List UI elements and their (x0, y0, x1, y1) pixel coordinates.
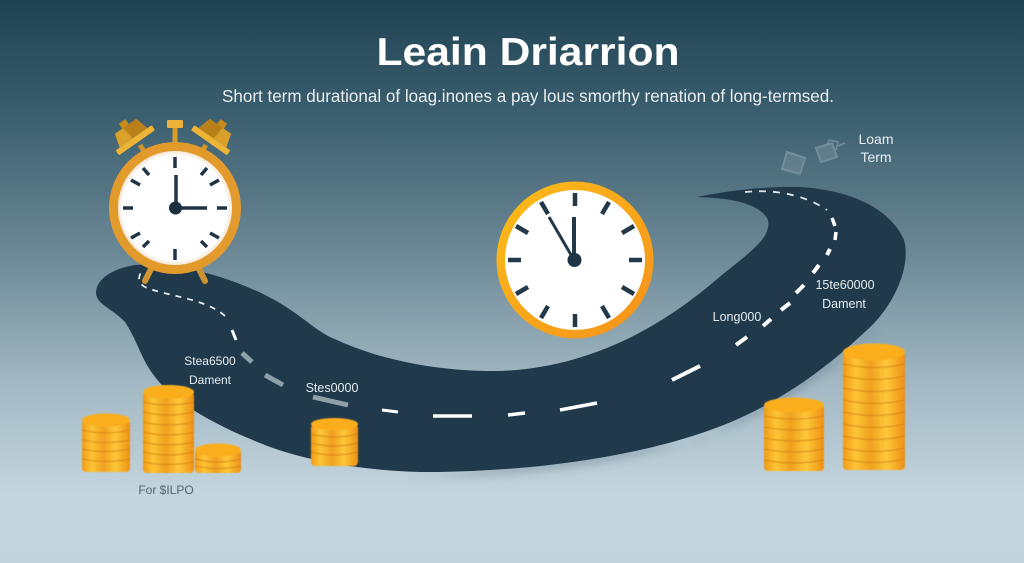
label: right step: 15te60000 (815, 278, 875, 292)
wall clock ticks (508, 193, 642, 327)
label: left step: Dament (189, 373, 232, 387)
icon: wall clock (496, 182, 654, 338)
clock feet (145, 267, 205, 281)
alarm bells (104, 109, 242, 158)
label: right step (815, 278, 875, 311)
icon: faded documents (782, 140, 845, 174)
coin stack 6 (843, 344, 905, 470)
coin stack 4 (311, 418, 358, 466)
label: middle step: Stes0000 (306, 381, 358, 395)
road (96, 187, 906, 480)
road centre dashes (139, 191, 836, 416)
label: loan term: Loam (858, 131, 894, 147)
title: Leain Driarrion (376, 31, 680, 74)
label: loan term (858, 131, 894, 165)
coin stack 5 (764, 398, 824, 471)
label: right step: Dament (822, 297, 866, 311)
clock hands (176, 175, 207, 208)
icon: alarm clock (104, 109, 242, 281)
label: left step (184, 354, 236, 387)
coin stack 2 (143, 385, 194, 473)
coin stack 3 (195, 444, 241, 473)
subtitle: Short term durational of loag.inones a pay lous smorthy renation of long-termsed. (222, 86, 834, 106)
clock ticks (123, 157, 227, 260)
label: loan term: Term (860, 149, 892, 165)
coin stack 1 (82, 414, 130, 472)
wall clock hands (572, 217, 576, 260)
label: for: For $ILPO (138, 483, 194, 497)
clock case (109, 142, 241, 274)
label: long: Long000 (713, 310, 761, 324)
label: left step: Stea6500 (184, 354, 236, 368)
